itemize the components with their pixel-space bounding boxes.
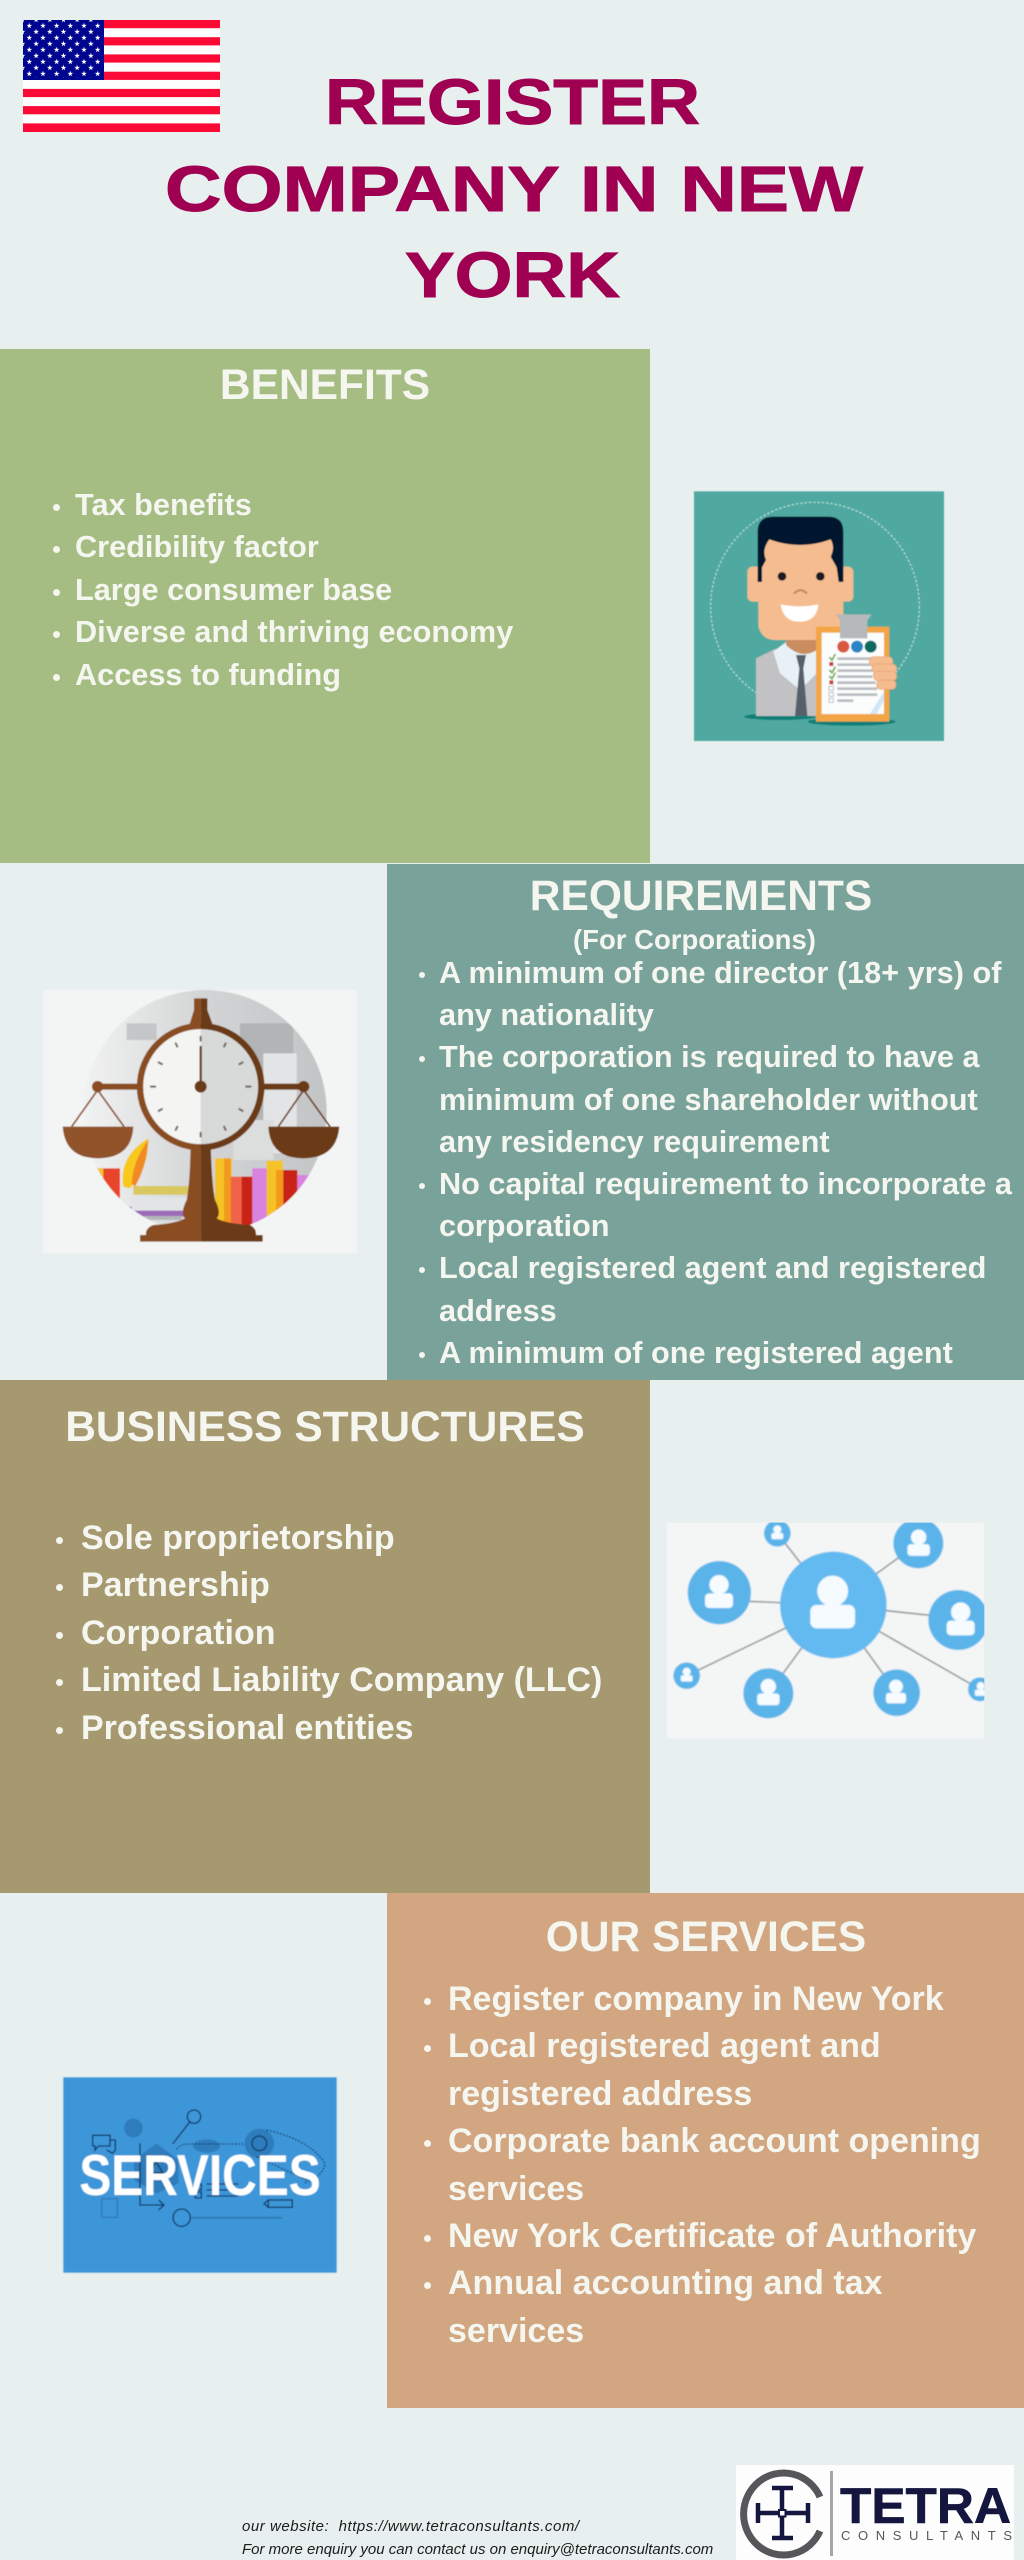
list: business structures: Partnership xyxy=(81,1566,270,1604)
icon: businessman with clipboard xyxy=(693,490,945,742)
footer contact text xyxy=(242,2518,713,2558)
panel: business structures xyxy=(0,1380,650,1893)
list: requirements: Local registered agent and registered xyxy=(439,1250,986,1285)
logo: Tetra Consultants: CONSULTANTS xyxy=(841,2528,1012,2543)
list: our services: Annual accounting and tax xyxy=(448,2264,882,2302)
list: our services: services xyxy=(448,2312,584,2350)
logo: Tetra Consultants xyxy=(736,2465,1014,2560)
list: our services: services xyxy=(448,2170,584,2208)
icon: services banner xyxy=(62,2076,338,2274)
list: requirements: address xyxy=(439,1293,557,1328)
list: business structures: Professional entities xyxy=(81,1709,414,1747)
list: business structures: Sole proprietorship xyxy=(81,1519,395,1557)
footer contact text: For more enquiry you can contact us on enquiry@tetraconsultants.com xyxy=(242,2541,713,2558)
title: COMPANY IN NEW xyxy=(165,153,864,225)
list: requirements: The corporation is required to have a xyxy=(439,1039,980,1074)
list: benefits: Large consumer base xyxy=(75,572,392,607)
list: business structures: Limited Liability Company (LLC) xyxy=(81,1661,602,1699)
list: requirements: any residency requirement xyxy=(439,1124,830,1159)
heading: benefits: BENEFITS xyxy=(220,362,430,409)
subheading: for corporations: (For Corporations) xyxy=(573,924,816,955)
icon: US flag xyxy=(23,20,220,132)
panel: our services xyxy=(387,1893,1024,2408)
title: YORK xyxy=(405,239,620,311)
logo: Tetra Consultants: TETRA xyxy=(840,2478,1011,2534)
list: benefits xyxy=(53,487,514,692)
list: our services: New York Certificate of Authority xyxy=(448,2217,976,2255)
list: requirements: No capital requirement to incorporate a xyxy=(439,1166,1012,1201)
list: requirements: corporation xyxy=(439,1208,610,1243)
title: REGISTER xyxy=(325,66,700,138)
icon: scales of justice clock xyxy=(44,990,356,1253)
list: requirements xyxy=(419,955,1012,1370)
list: benefits: Access to funding xyxy=(75,657,341,692)
list: benefits: Tax benefits xyxy=(75,487,252,522)
heading: requirements: REQUIREMENTS xyxy=(530,873,872,920)
list: our services: registered address xyxy=(448,2075,752,2113)
icon: people network xyxy=(667,1522,984,1738)
list: business structures xyxy=(56,1519,602,1747)
heading: our services: OUR SERVICES xyxy=(546,1914,866,1961)
list: business structures: Corporation xyxy=(81,1614,276,1652)
panel: benefits xyxy=(0,349,650,863)
list: requirements: A minimum of one registered agent xyxy=(439,1335,953,1370)
list: requirements: A minimum of one director (18+ yrs) of xyxy=(439,955,1001,990)
heading: business structures: BUSINESS STRUCTURES xyxy=(65,1404,585,1451)
panel: requirements xyxy=(387,864,1024,1380)
list: our services xyxy=(424,1980,981,2350)
list: our services: Register company in New York xyxy=(448,1980,944,2018)
list: benefits: Diverse and thriving economy xyxy=(75,614,513,649)
list: our services: Corporate bank account opening xyxy=(448,2122,981,2160)
footer contact text: our website: https://www.tetraconsultants.com/ xyxy=(242,2518,580,2535)
list: requirements: minimum of one shareholder without xyxy=(439,1082,978,1117)
title xyxy=(165,66,864,311)
list: our services: Local registered agent and xyxy=(448,2027,881,2065)
list: benefits: Credibility factor xyxy=(75,529,319,564)
list: requirements: any nationality xyxy=(439,997,654,1032)
